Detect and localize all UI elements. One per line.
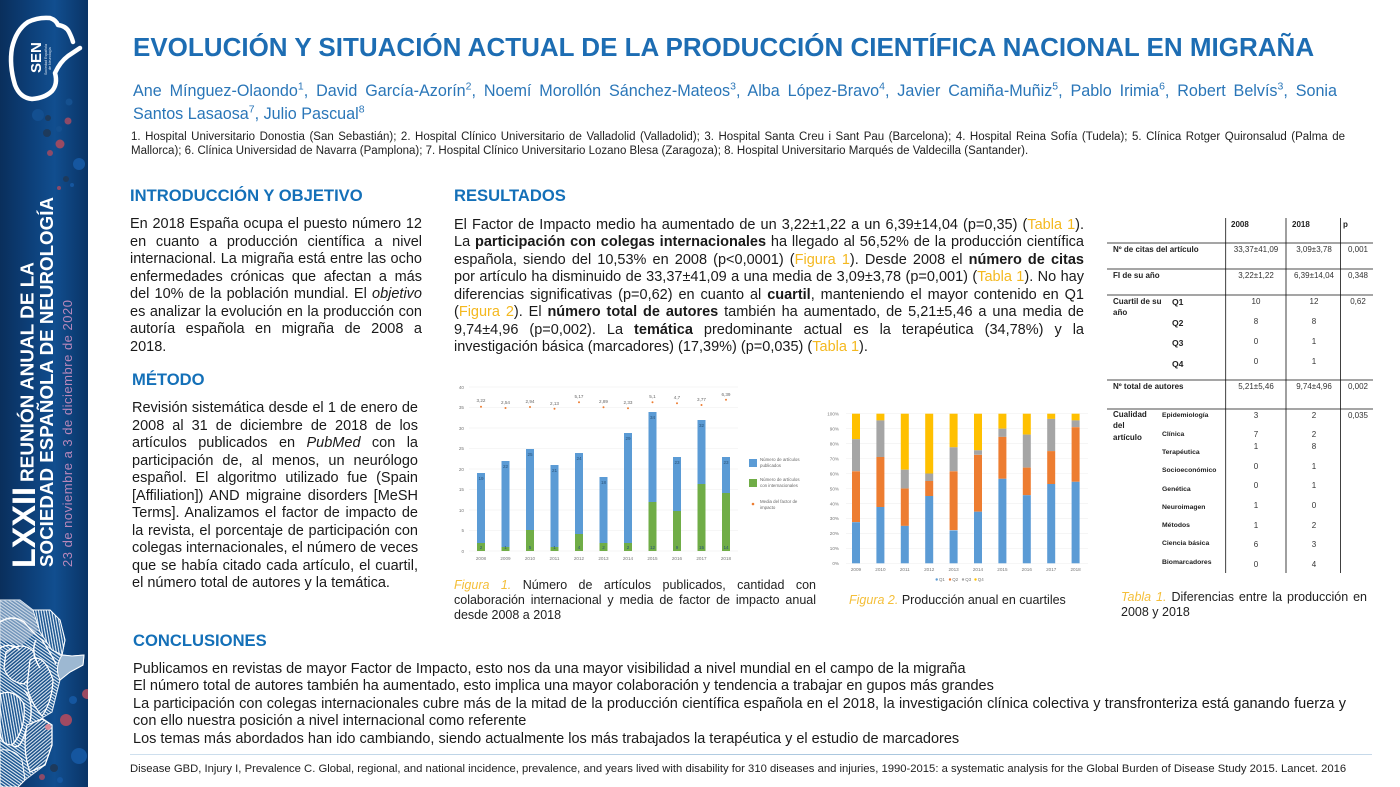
chart: artículos por año [459,385,800,561]
chart: artículos por año: 9 [676,545,679,550]
icon: SEN logo: de Neurología [48,47,52,70]
chart: artículos por año: 2015 [647,556,658,561]
icon: SEN logo: Sociedad Española [44,44,48,75]
table: diferencias 2008 vs 2018: Q2 [1172,318,1184,328]
chart legend: Q1 [939,577,945,582]
table values: 3,22±1,22 [1238,271,1274,280]
chart: artículos por año: 2016 [672,556,683,561]
authors [133,81,1337,123]
table values: 0 [1254,357,1259,366]
table values: 8 [1254,317,1259,326]
table values: 9,74±4,96 [1296,382,1332,391]
table values: 0 [1254,560,1259,569]
chart: cuartiles: 0% [832,561,839,566]
chart: cuartiles: 70% [830,456,839,462]
row labels: año [1113,308,1127,317]
table: diferencias 2008 vs 2018: Epidemiología [1162,412,1209,419]
chart legend [749,457,800,510]
chart: artículos por año: 2,89 [599,399,608,404]
text: conclusiones: Los temas más abordados han ido cambiando, siendo actualmente los más trabajados la terapéutica y el estudio de marcadores [133,730,959,746]
chart: artículos por año: 15 [699,545,704,550]
table values [1234,245,1369,569]
caption: tabla 1: 2008 y 2018 [1121,605,1190,619]
chart: artículos por año: 5,1 [649,394,656,399]
table: diferencias 2008 vs 2018: Biomarcadores [1162,559,1212,566]
text: método: [Affiliation]) AND migraine disorders [MeSH [132,488,418,504]
table header: 2018 [1292,220,1310,229]
chart: artículos por año: 40 [459,385,464,390]
text: método: 2008 al 31 de diciembre de 2018 de los [132,418,418,434]
chart legend: Q4 [978,577,984,582]
chart: cuartiles: 2012 [924,567,935,572]
table: diferencias 2008 vs 2018: Ciencia básica [1162,540,1209,547]
chart legend: Media del factor de [760,499,798,504]
heading: método: MÉTODO [132,370,205,389]
chart: artículos por año: 2 [480,545,483,550]
row labels: Nº de citas del artículo [1113,245,1199,254]
sidebar conference title: SOCIEDAD ESPAÑOLA DE NEUROLOGÍA [36,197,57,567]
chart: cuartiles: 2014 [973,567,984,572]
table header: p [1343,220,1348,229]
table values: 1 [1254,442,1259,451]
table header [1231,220,1348,229]
table: diferencias 2008 vs 2018: Socioeconómico [1162,467,1216,474]
chart: artículos por año: 2,33 [624,400,633,405]
table values: 3 [1254,411,1259,420]
chart: artículos por año: 15 [459,487,464,492]
chart: artículos por año: 2009 [500,556,511,561]
chart: artículos por año: 10 [459,508,464,513]
chart: artículos por año: 18 [601,480,606,485]
chart: cuartiles: 2015 [997,567,1008,572]
chart: artículos por año: 25 [527,452,533,457]
text: introducción: en cuanto a producción científica a nivel [130,234,422,250]
chart: cuartiles: 60% [830,472,839,476]
text: resultados [454,216,1084,355]
chart legend: Número de artículos [760,457,800,462]
chart: artículos por año: 25 [459,446,464,451]
chart: artículos por año: 20 [459,467,464,472]
chart legend: Q3 [965,577,972,582]
chart: artículos por año: 2013 [598,556,609,561]
chart: artículos por año: 24 [576,456,582,461]
table values: 0,001 [1348,245,1369,254]
chart: cuartiles: 100% [827,412,839,416]
table: diferencias 2008 vs 2018: Q3 [1172,338,1184,348]
chart: artículos por año: 2017 [696,556,707,561]
table values: 1 [1312,481,1317,490]
chart: artículos por año: 2018 [721,556,732,561]
text: conclusiones [133,660,1346,746]
chart legend: impacto [760,505,776,510]
table values: 2 [1312,430,1317,439]
table: diferencias 2008 vs 2018: Q1 [1172,297,1184,307]
heading: conclusiones: CONCLUSIONES [133,631,267,650]
sidebar conference title [6,197,75,568]
chart: cuartiles: 2009 [851,567,862,572]
chart: cuartiles: 20% [830,531,839,536]
text: método [132,400,418,591]
text: conclusiones: Publicamos en revistas de mayor Factor de Impacto, esto nos da una mayor visibilidad a nivel mundial en el campo de la migraña [133,660,966,676]
text: método: participación de, al menos, un neurólogo [132,452,418,468]
table: diferencias 2008 vs 2018: Genética [1162,486,1191,493]
chart: artículos por año: 2012 [574,556,585,561]
table values: 2 [1312,411,1317,420]
chart: cuartiles: 2011 [900,567,910,572]
row labels: del [1113,421,1125,430]
stacked bars [852,414,1080,563]
chart: artículos por año: 2 [627,545,630,550]
heading: introducción: INTRODUCCIÓN Y OBJETIVO [130,186,363,205]
authors: Ane Mínguez-Olaondo1, David García-Azorín2, Noemí Morollón Sánchez-Mateos3, Alba López-Bravo4, Javier Camiña-Muñiz5, Pablo Irimia6, Robert Belvís3, Sonia [133,81,1337,100]
table values: 0 [1254,462,1259,471]
table: diferencias 2008 vs 2018: Terapéutica [1162,449,1200,456]
sidebar conference title: 23 de noviembre a 3 de diciembre de 2020 [60,300,75,567]
caption: figura 1: colaboración internacional y media de factor de impacto anual [454,593,816,607]
caption: figura 1: desde 2008 a 2018 [454,608,561,622]
text: método: la revista, el porcentaje de participación con [132,522,418,538]
chart: artículos por año: 1 [504,545,507,550]
chart: cuartiles: 10% [830,546,839,551]
table values: 0,348 [1348,271,1369,280]
row labels: Cualidad [1113,410,1147,419]
chart: artículos por año: 2014 [623,556,634,561]
chart: artículos por año: 2011 [550,556,560,561]
table values: 0 [1254,337,1259,346]
chart: artículos por año: 3,22 [477,398,486,403]
chart: cuartiles: 50% [830,486,839,492]
chart: artículos por año: 34 [650,415,655,420]
text: resultados: 9,74±4,96 (p=0,002). La temática predominante actual es la terapéutica (34,78%) y la [454,322,1084,338]
table values: 7 [1254,430,1259,439]
text: introducción: En 2018 España ocupa el puesto número 12 [130,216,422,232]
table values: 1 [1312,462,1317,471]
chart: artículos por año: 29 [625,436,631,441]
chart: artículos por año: 30 [459,426,464,431]
row labels: Nº total de autores [1113,382,1184,391]
chart: cuartiles: 2010 [875,567,886,572]
chart: artículos por año: 4,7 [674,395,681,400]
text: resultados: La participación con colegas internacionales ha llegado al 56,52% de la producción científica [454,234,1084,250]
text: introducción: autoría española en migraña de 2008 a [130,321,422,337]
row labels: FI de su año [1113,271,1160,280]
table values: 8 [1312,317,1317,326]
text: resultados: investigación básica (marcadores) (17,39%) (p=0,035) (Tabla 1). [454,339,868,355]
chart: cuartiles: 2016 [1022,567,1032,572]
chart: cuartiles: 80% [830,442,839,446]
text: método: Terms]. Analizamos el factor de impacto de [132,505,418,521]
table values: 0 [1312,501,1317,510]
icon: scattered dots top [32,98,85,190]
icon: brain illustration [0,600,84,787]
text: resultados: El Factor de Impacto medio ha aumentado de un 3,22±1,22 a un 6,39±14,04 (p=0,35) (Tabla 1). [454,216,1084,232]
table values: 2 [1312,521,1317,530]
chart: artículos por año: 4 [578,545,581,550]
affiliations [131,131,1345,157]
affiliations: Mallorca); 6. Clínica Universidad de Navarra (Pamplona); 7. Hospital Clínico Universitario Lozano Blesa (Zaragoza); 8. Hospital Universitario Marqués de Valdecilla (Santander). [131,145,1028,157]
chart: artículos por año: 2 [602,545,605,550]
caption: figura 1: Figura 1. Número de artículos publicados, cantidad con [454,578,816,592]
chart: cuartiles: 90% [830,426,839,432]
chart: cuartiles: 2013 [948,567,959,572]
sidebar banner [0,0,88,787]
text: introducción: enfermedades crónicas que afectan a más [130,268,422,284]
text: método: Revisión sistemática desde el 1 de enero de [132,400,418,416]
table values: 4 [1312,560,1317,569]
chart: artículos por año: 0 [461,549,464,554]
sidebar conference title: REUNIÓN ANUAL DE LA [16,262,38,482]
table values: 5,21±5,46 [1238,382,1274,391]
reference: Disease GBD, Injury I, Prevalence C. Global, regional, and national incidence, prevalence, and years lived with disability for 310 diseases and injuries, 1990-2015: a systematic analysis for the Global Burden of Disease Study 2015. Lancet. 2016 [130,763,1346,775]
chart: artículos por año: 2,54 [501,400,510,405]
chart legend [936,577,984,582]
chart: artículos por año: 2,94 [526,399,535,404]
icon: SEN logo: SEN [28,42,45,73]
sidebar conference title: LXXII [6,487,42,568]
chart: artículos por año: 5 [529,545,532,550]
affiliations: 1. Hospital Universitario Donostia (San Sebastián); 2. Hospital Clínico Universitario de Valladolid (Valladolid); 3. Hospital Santa Creu i Sant Pau (Barcelona); 4. Hospital Reina Sofía (Tudela); 5. Clínica Rotger Quironsalud (Palma de [131,131,1345,143]
green bars [477,484,730,551]
chart: artículos por año: 1 [553,545,556,550]
table: diferencias 2008 vs 2018 [1107,218,1373,573]
chart: artículos por año: 23 [723,460,729,465]
chart: artículos por año: 2010 [525,556,536,561]
text: conclusiones: El número total de autores también ha aumentado, esto implica una mayor colaboración y tendencia a trabajar en gupos más grandes [133,678,994,694]
row labels: Cuartil de su [1113,297,1162,306]
chart: artículos por año: 14 [723,545,729,550]
chart: artículos por año: 23 [674,460,680,465]
icon: scattered dots bottom [39,689,92,783]
chart: artículos por año: 19 [478,476,484,481]
table values: 0,62 [1350,297,1366,306]
table values: 12 [1310,297,1319,306]
table values: 8 [1312,442,1317,451]
row labels: artículo [1113,433,1142,442]
table values: 10 [1252,297,1261,306]
chart legend: con internacionales [760,483,799,488]
table values: 6 [1254,540,1259,549]
chart: artículos por año: 35 [459,405,464,410]
table: diferencias 2008 vs 2018: Métodos [1162,522,1190,529]
text: método: el número total de autores y la temática. [132,575,390,591]
chart: artículos por año: 3,77 [697,397,706,402]
caption: tabla 1 [1121,590,1367,619]
blue bars [477,412,730,551]
text: introducción: es analizar la evolución en la producción con [130,304,422,320]
text: introducción: 2018. [130,338,166,354]
title: EVOLUCIÓN Y SITUACIÓN ACTUAL DE LA PRODUCCIÓN CIENTÍFICA NACIONAL EN MIGRAÑA [133,32,1314,62]
table values: 0 [1254,481,1259,490]
table header: 2008 [1231,220,1249,229]
table values: 0,002 [1348,382,1369,391]
chart: cuartiles: 2018 [1070,567,1081,572]
text: introducción: del 10% de la población mundial. El objetivo [130,286,422,302]
table values: 33,37±41,09 [1234,245,1279,254]
table values: 6,39±14,04 [1294,271,1335,280]
table values: 0,035 [1348,411,1369,420]
text: método: artículos publicados en PubMed con la [132,435,418,451]
chart: artículos por año: 12 [650,545,655,550]
text: método: colegas internacionales, el número de veces [132,540,418,556]
chart: cuartiles: 30% [830,516,839,521]
table values: 3,09±3,78 [1296,245,1332,254]
table values: 1 [1254,501,1259,510]
impact factor markers [480,399,727,410]
text: resultados: (Figura 2). El número total de autores también ha aumentado, de 5,21±5,46 a una media de [454,304,1084,320]
chart legend: Q2 [952,577,959,582]
caption: figura 2: Figura 2. Producción anual en cuartiles [849,593,1066,607]
chart: cuartiles: 2017 [1046,567,1057,572]
icon: SEN logo [11,18,80,99]
chart: artículos por año: 2,13 [550,401,559,406]
text: resultados: por artículo ha disminuido de 33,37±41,09 a una media de 3,09±3,78 (p=0,001) (Tabla 1). No hay [454,269,1084,285]
table: diferencias 2008 vs 2018: Q4 [1172,359,1184,369]
table: diferencias 2008 vs 2018: Clínica [1162,431,1185,438]
text: introducción [130,216,422,354]
table values: 1 [1312,357,1317,366]
text: introducción: internacional. La migraña está entre las ocho [130,251,422,267]
table values: 1 [1312,337,1317,346]
authors: Santos Lasaosa7, Julio Pascual8 [133,105,365,123]
chart: artículos por año: 6,39 [722,392,731,397]
text: conclusiones: La participación con colegas internacionales cubre más de la mitad de la producción científica española en el 2018, la investigación clínica colectiva y transfronteriza está ganando fuerza y [133,696,1346,712]
chart legend: publicados [760,463,782,468]
chart: cuartiles [827,412,1088,582]
chart: cuartiles: 40% [830,502,839,506]
table: diferencias 2008 vs 2018: Neuroimagen [1162,504,1205,511]
caption: figura 1 [454,578,816,622]
chart: artículos por año: 5 [461,528,464,533]
text: conclusiones: con ello nuestra posición a nivel internacional como referente [133,713,526,729]
text: método: que se había citado cada artículo, el cuartil, [132,558,418,574]
text: método: español. El algoritmo utilizado fue (Spain [132,470,418,486]
caption: tabla 1: Tabla 1. Diferencias entre la producción en [1121,590,1367,604]
table values: 3 [1312,540,1317,549]
heading: resultados: RESULTADOS [454,186,566,205]
chart: artículos por año: 32 [699,423,704,428]
chart: artículos por año: 5,17 [575,394,584,399]
chart: artículos por año: 22 [503,464,508,469]
text: resultados: española, siendo del 10,53% en 2008 (p<0,0001) (Figura 1). Desde 2008 el número de citas [454,252,1084,268]
chart: artículos por año: 21 [552,468,557,473]
chart: artículos por año: 2008 [476,556,487,561]
text: resultados: diferencias significativas (p=0,62) en cuanto al cuartil, manteniendo el mayor contenido en Q1 [454,286,1084,302]
row labels [1113,245,1199,442]
table values: 1 [1254,521,1259,530]
chart legend: Número de artículos [760,477,800,482]
